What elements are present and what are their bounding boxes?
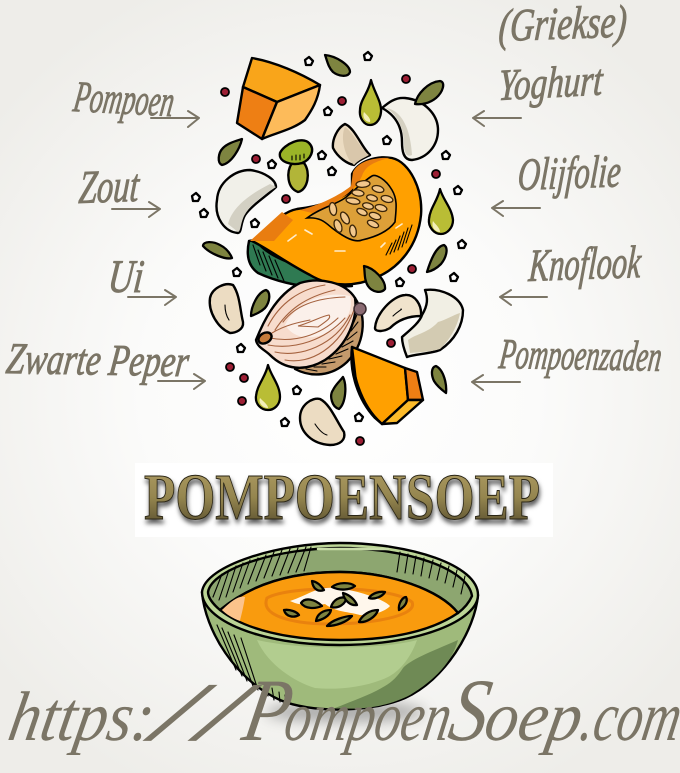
ingredient illustration	[192, 52, 466, 445]
icons: salt crystals	[192, 52, 466, 426]
website url: oep	[479, 677, 590, 756]
label: Olijfolie with arrow	[492, 146, 623, 216]
bowl shadow	[265, 702, 425, 722]
label: Ui with arrow: Ui	[106, 252, 146, 303]
icon: oil drop top	[360, 80, 381, 125]
label: Knoflook with arrow	[500, 236, 644, 305]
soup	[220, 572, 458, 640]
icon: green seed with lid	[280, 140, 312, 192]
icon: pumpkin chunk bottom	[351, 347, 423, 424]
website url: //	[138, 667, 267, 759]
label: Zout with arrow: Zout	[77, 161, 142, 214]
label: Knoflook with arrow: Knoflook	[527, 236, 644, 291]
website url: https:	[3, 677, 162, 756]
website url: ompoen	[279, 677, 459, 756]
label: Pompoen with arrow: Pompoen	[70, 72, 178, 126]
label: Yoghurt with arrow: Yoghurt	[497, 55, 605, 110]
website url: S	[442, 661, 499, 760]
icon: oil drop right	[429, 189, 453, 234]
icon: garlic chunk lower right	[402, 290, 463, 357]
title banner	[135, 461, 553, 537]
icon: pumpkin wedge	[250, 157, 421, 284]
icon: onion	[256, 281, 366, 374]
icon: garlic clove upper left	[217, 170, 276, 233]
cream swirl	[290, 588, 390, 615]
icon: garlic clove upper right	[382, 98, 438, 160]
label: Olijfolie with arrow: Olijfolie	[516, 146, 623, 200]
icon: green pumpkin rind	[248, 240, 352, 288]
icon: beige clove left	[210, 284, 243, 333]
icon: beige clove right	[375, 295, 421, 331]
icon: soup bowl	[202, 543, 478, 710]
icons: black pepper corns	[221, 75, 440, 445]
label: Ui with arrow	[106, 252, 176, 305]
soup seeds	[284, 581, 407, 626]
label: Zwarte Peper with arrow: Zwarte Peper	[4, 334, 192, 386]
website url: P	[235, 661, 301, 760]
bowl highlight	[257, 640, 417, 689]
icon: pumpkin cube	[237, 58, 320, 139]
icon: oil drop bottom	[256, 365, 280, 410]
bowl shaded side	[335, 640, 458, 709]
icon: pumpkin seeds	[203, 55, 447, 409]
icon: beige clove top	[333, 124, 370, 165]
pumpkin seed cavity	[307, 176, 396, 241]
icon: beige clove bottom	[300, 399, 344, 445]
label: Yoghurt with arrow	[473, 55, 605, 126]
title: POMPOENSOEP	[144, 461, 540, 534]
label: Pompoenzaden with arrow	[472, 331, 665, 390]
